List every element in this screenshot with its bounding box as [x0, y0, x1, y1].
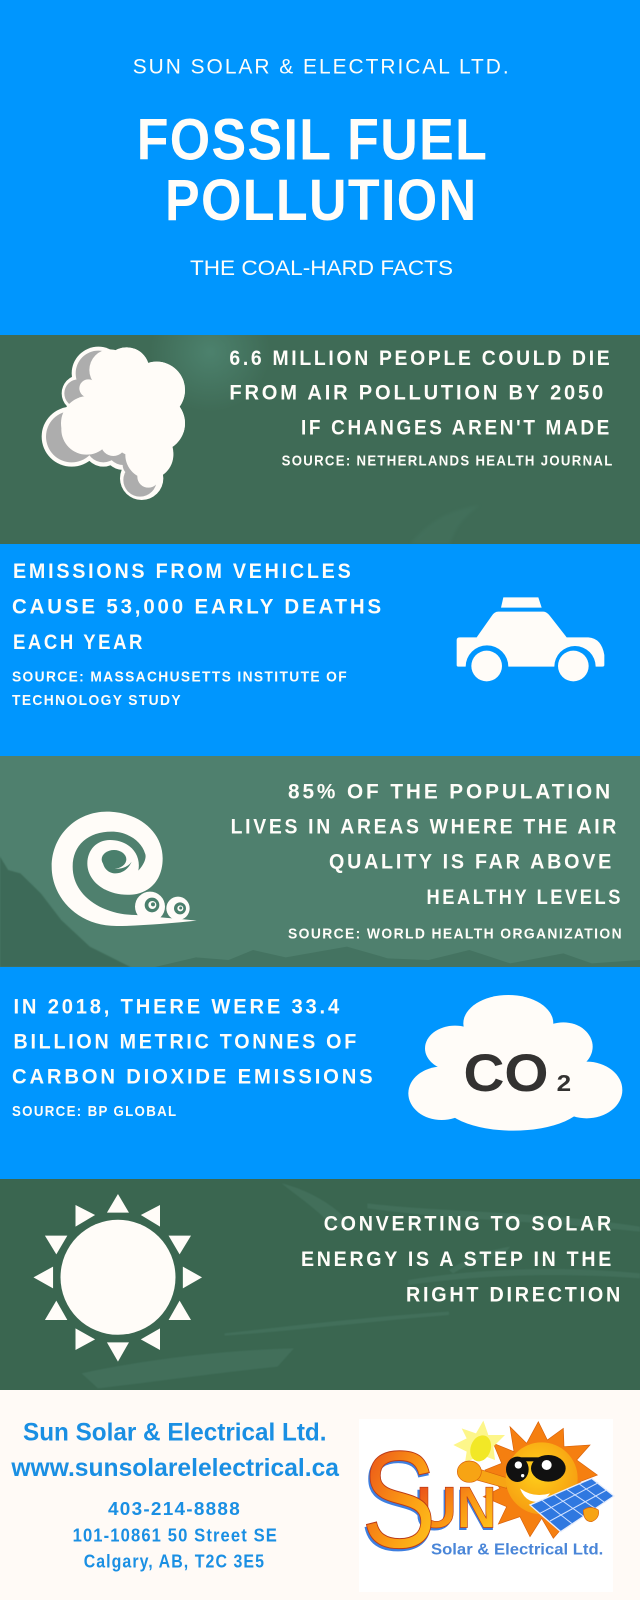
logo arm and fist — [457, 1461, 508, 1488]
panel: footer — [0, 1390, 640, 1600]
panel: vehicle emissions — [0, 544, 640, 756]
logo: Sun Solar & Electrical — [359, 1419, 614, 1592]
icon: CO2 cloud: CO — [464, 1044, 548, 1103]
company name: SUN SOLAR & ELECTRICAL LTD. — [133, 55, 511, 78]
icon: wind spiral — [52, 812, 197, 926]
logo letters: S — [359, 1426, 436, 1580]
source: SOURCE: BP GLOBAL — [12, 1103, 178, 1120]
contact details — [73, 1499, 278, 1572]
source: SOURCE: MASSACHUSETTS INSTITUTE OF — [12, 669, 348, 686]
fact text: ENERGY IS A STEP IN THE — [301, 1247, 614, 1271]
company name and website: Sun Solar & Electrical Ltd. — [23, 1419, 326, 1447]
fact text: IN 2018, THERE WERE 33.4 — [14, 994, 342, 1018]
panel: solar energy — [0, 1179, 640, 1390]
fact text: EACH YEAR — [13, 630, 145, 654]
source — [12, 669, 348, 709]
icon: smoke cloud — [42, 347, 185, 500]
fact text: QUALITY IS FAR ABOVE — [329, 849, 614, 873]
source: SOURCE: WORLD HEALTH ORGANIZATION — [288, 925, 623, 942]
small curls — [135, 892, 190, 922]
fact text: CARBON DIOXIDE EMISSIONS — [12, 1064, 376, 1088]
title — [137, 108, 488, 233]
panel: air pollution deaths — [0, 335, 640, 544]
logo sunglasses — [506, 1455, 566, 1482]
icon: CO2 cloud — [408, 995, 622, 1131]
contact details: Calgary, AB, T2C 3E5 — [84, 1552, 265, 1572]
logo tagline: Solar & Electrical Ltd. — [431, 1542, 603, 1559]
fact text — [229, 346, 612, 439]
company name and website: www.sunsolarelelectrical.ca — [10, 1454, 340, 1482]
fact text: FROM AIR POLLUTION BY 2050 — [229, 380, 606, 404]
panel: carbon dioxide — [0, 967, 640, 1179]
logo smile — [520, 1488, 550, 1502]
panel: header — [0, 0, 640, 335]
panel: air quality — [0, 756, 640, 967]
background: streaks — [82, 1183, 640, 1388]
fact text: CONVERTING TO SOLAR — [324, 1212, 614, 1236]
logo letters: S — [361, 1423, 436, 1577]
background: mountains — [0, 857, 640, 967]
logo sun face — [506, 1442, 578, 1514]
subtitle: THE COAL-HARD FACTS — [190, 256, 453, 280]
fact text — [12, 559, 384, 654]
title: POLLUTION — [165, 168, 478, 233]
fact text — [231, 779, 623, 909]
logo hand — [583, 1507, 599, 1522]
fact text: BILLION METRIC TONNES OF — [14, 1029, 359, 1053]
icon: sun — [33, 1194, 202, 1362]
logo letters: UN — [417, 1475, 497, 1540]
company name and website — [10, 1419, 340, 1482]
icon: CO2 cloud: 2 — [557, 1070, 571, 1096]
fact text: RIGHT DIRECTION — [406, 1283, 623, 1307]
logo letters: UN — [414, 1478, 497, 1543]
logo bulb — [453, 1421, 505, 1464]
fact text: EMISSIONS FROM VEHICLES — [13, 559, 354, 583]
fact text — [12, 994, 376, 1088]
title: FOSSIL FUEL — [137, 108, 488, 172]
contact details: 403-214-8888 — [108, 1499, 241, 1519]
logo sun rays — [483, 1422, 597, 1538]
source: TECHNOLOGY STUDY — [12, 692, 182, 709]
spiral centre — [102, 850, 132, 873]
fact text — [301, 1212, 623, 1307]
fact text: 85% OF THE POPULATION — [288, 779, 613, 803]
logo letters — [359, 1423, 497, 1580]
contact details: 101-10861 50 Street SE — [73, 1526, 278, 1546]
logo solar panel — [530, 1478, 614, 1532]
icon: car — [457, 597, 604, 681]
fact text: CAUSE 53,000 EARLY DEATHS — [12, 594, 384, 618]
